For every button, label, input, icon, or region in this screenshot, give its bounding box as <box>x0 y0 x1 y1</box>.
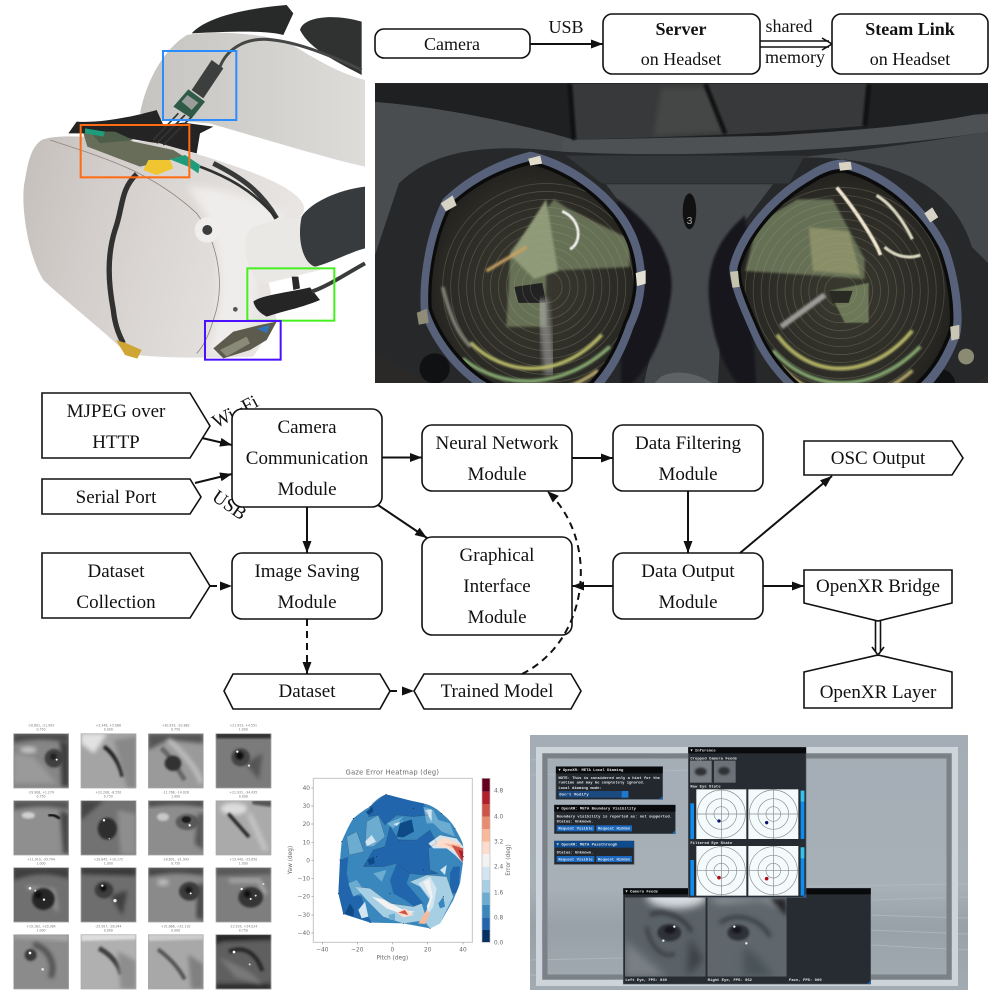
captions: 1.000 <box>36 929 46 933</box>
window: Camera Feeds: ▼ Camera Feeds <box>625 890 659 895</box>
module: Data Output: Module <box>658 592 718 613</box>
artifact: Trained Model: Trained Model <box>441 681 553 702</box>
colorbar: 1.6 <box>494 890 504 896</box>
colorbar: Error (deg) <box>506 844 512 876</box>
module: Image Saving: Module <box>277 592 337 613</box>
window: Passthrough: ▼ OpenXR: META Passthrough <box>557 842 618 847</box>
highlight: orange circuit board box <box>81 125 189 177</box>
photo: headset lenses with eye tracking ring: 3 <box>687 216 693 227</box>
arrow: trained model to neural network <box>522 491 581 674</box>
input: Dataset Collection <box>42 553 210 618</box>
captions: +21.931, -34.435 <box>229 791 257 795</box>
plot area with error contours: 40 <box>459 947 467 953</box>
captions: -13.293, +24.024 <box>229 925 257 929</box>
arrow: image saving to dataset <box>306 619 308 674</box>
sample 7 <box>148 800 204 855</box>
plot area with error contours: −40 <box>298 931 310 937</box>
module: Graphical Interface: Module <box>467 607 527 628</box>
window: Boundary Visibility <box>554 805 675 834</box>
colorbar: 0.0 <box>494 940 504 946</box>
window: Boundary Visibility: Boundary visibility is reported as: not supported. <box>557 814 672 819</box>
module: Camera Communication: Module <box>277 479 337 500</box>
plot area with error contours <box>288 778 472 962</box>
sample 2 <box>81 733 136 788</box>
input: Dataset Collection: Collection <box>76 592 156 613</box>
artifact: Dataset: Dataset <box>279 681 336 702</box>
module: Data Output: Data Output <box>641 561 735 582</box>
window: Boundary Visibility: ▼ OpenXR: META Boundary Visibility <box>557 806 637 811</box>
module: Graphical Interface: Interface <box>463 576 531 597</box>
sample 9 <box>13 867 69 922</box>
output: OpenXR Bridge: OpenXR Bridge <box>816 576 940 597</box>
plot area with error contours: 0 <box>390 947 394 953</box>
module: Image Saving <box>232 553 382 619</box>
captions: +20.845, +10.172 <box>94 858 123 862</box>
arrow: dataset to trained model <box>390 690 414 692</box>
plot area with error contours: −20 <box>351 947 364 953</box>
arrow: output to interface <box>572 585 613 587</box>
module: Neural Network <box>422 425 572 491</box>
box: Camera: Camera <box>424 34 480 54</box>
window: Passthrough: Status: Unknown. <box>557 850 593 855</box>
input: MJPEG over HTTP: HTTP <box>92 432 140 453</box>
module: Neural Network: Module <box>467 464 527 485</box>
arrow: camera to interface <box>378 505 427 538</box>
highlight: blue USB connector box <box>163 51 236 120</box>
colorbar: 2.4 <box>494 865 504 871</box>
artifact: Trained Model <box>414 674 581 709</box>
window: Local Dimming <box>556 767 663 799</box>
arrow: shared memory link <box>760 16 832 67</box>
arrow: output to OSC <box>740 476 832 553</box>
sample 1 <box>13 733 69 788</box>
captions: 1.000 <box>239 862 248 866</box>
captions: -18.601, -21.993 <box>162 858 189 862</box>
captions: +3.346, +5.068 <box>96 724 121 728</box>
sample 16 <box>216 934 272 989</box>
scene background <box>530 735 968 990</box>
sample 14 <box>81 934 136 989</box>
captions: +21.953, +4.551 <box>230 724 257 728</box>
captions: 1.000 <box>36 862 46 866</box>
arrow: shared memory link: memory <box>765 47 825 67</box>
window: Inference <box>688 747 806 897</box>
arrow: camera to image saving <box>306 507 308 553</box>
arrow: Wi-Fi to camera module <box>202 438 232 445</box>
box: Server on Headset <box>603 14 760 74</box>
window: Passthrough: Request Visible <box>558 857 593 862</box>
window: Local Dimming: runtime and may be completely ignored. <box>558 780 645 785</box>
sample 3 <box>148 733 204 788</box>
module: Image Saving: Image Saving <box>254 561 360 582</box>
window: Passthrough <box>554 841 634 864</box>
sample 11 <box>148 867 204 922</box>
openness bars <box>690 791 804 896</box>
window: Camera Feeds: Left Eye, FPS: 040 <box>625 978 668 983</box>
sample 10 <box>81 867 136 922</box>
plot area with error contours: 40 <box>303 786 310 792</box>
module: Graphical Interface <box>422 537 572 635</box>
captions: -25.507, -28.944 <box>95 925 122 929</box>
bottom padding and hands <box>375 351 988 450</box>
arrow: bridge to layer <box>872 621 884 655</box>
plot area with error contours: 30 <box>303 804 310 810</box>
captions: +22.208, -8.550 <box>95 791 121 795</box>
window: Inference: Filtered Eye State <box>690 841 733 846</box>
plot area with error contours: −30 <box>298 913 310 919</box>
box: Steam Link on Headset: on Headset <box>870 49 950 69</box>
diagram: streaming pipeline <box>375 14 988 74</box>
captions: +11.910, -33.794 <box>27 858 55 862</box>
chart: gaze error heatmap <box>288 769 512 962</box>
window: Inference: Raw Eye State <box>690 785 721 789</box>
box: Camera <box>375 29 530 58</box>
window: Local Dimming: Local dimming mode: <box>558 786 602 791</box>
module: Data Filtering: Module <box>658 464 718 485</box>
artifact: Dataset <box>224 674 390 709</box>
arrow: filtering to output <box>687 491 689 553</box>
box: Server on Headset: Server <box>656 19 706 39</box>
captions: -29.908, +1.279 <box>28 791 54 795</box>
colorbar: 3.2 <box>494 840 504 846</box>
plot area with error contours: 20 <box>424 947 432 953</box>
arrow: neural network to filtering <box>572 457 613 459</box>
colorbar: 4.8 <box>494 789 504 795</box>
input: MJPEG over HTTP <box>42 393 210 458</box>
captions: 1.000 <box>104 862 113 866</box>
arrow: USB to camera module <box>195 474 232 483</box>
left eye feed <box>625 897 706 977</box>
window: Inference: ▼ Inference <box>690 749 716 754</box>
colorbar: 0.8 <box>494 915 504 921</box>
window: Inference: Cropped Camera Feeds <box>690 756 738 761</box>
diagram: software architecture flowchart <box>42 391 963 709</box>
sample 6 <box>81 800 136 855</box>
captions: 1.000 <box>171 795 180 799</box>
captions: 0.000 <box>239 795 248 799</box>
chart title: Gaze Error Heatmap (deg) <box>346 769 439 777</box>
window: Local Dimming: NOTE: This is considered only a hint for the <box>558 776 661 781</box>
window: Boundary Visibility: Status: Unknown. <box>557 820 593 825</box>
output: OSC <box>804 441 963 475</box>
highlight: green cable plug box <box>247 268 334 321</box>
sample 4 <box>216 733 271 788</box>
plot area with error contours: −10 <box>298 877 310 883</box>
window: Camera Feeds: Right Eye, FPS: 052 <box>708 978 753 983</box>
plot area with error contours: 20 <box>303 822 310 828</box>
arrow: shared memory link: shared <box>766 16 812 36</box>
captions: +31.686, +32.110 <box>161 925 190 929</box>
figure: VR debug interface screenshot <box>530 735 968 990</box>
box: Steam Link on Headset <box>832 14 988 74</box>
plot area with error contours: −20 <box>298 895 310 901</box>
output: OpenXR Bridge <box>804 570 952 621</box>
window: Local Dimming: Don't Modify <box>559 793 589 798</box>
captions: +30.933, -20.882 <box>162 724 190 728</box>
window: Boundary Visibility: Request Hidden <box>598 827 631 832</box>
sample 15 <box>148 934 204 989</box>
captions: 0.000 <box>104 929 113 933</box>
output: OpenXR Layer: OpenXR Layer <box>820 682 937 703</box>
raw and filtered eye state plots <box>696 789 798 896</box>
module: Neural Network: Neural Network <box>436 433 559 454</box>
captions: 0.750 <box>36 795 46 799</box>
sample 13 <box>13 934 69 989</box>
label: Wi-Fi: Wi−Fi <box>209 391 262 433</box>
module: Data Filtering <box>613 425 763 491</box>
window: Camera Feeds: Face, FPS: 000 <box>789 979 822 983</box>
arrow: USB link: USB <box>548 17 584 37</box>
module: Data Output <box>613 553 763 619</box>
captions: 0.000 <box>104 728 113 732</box>
arrow: camera to neural network <box>382 456 422 458</box>
colorbar: 4.0 <box>494 815 504 821</box>
input: Dataset Collection: Dataset <box>88 561 145 582</box>
window: Camera Feeds <box>623 885 871 984</box>
module: Camera Communication <box>232 409 382 507</box>
captions: 0.750 <box>239 929 248 933</box>
captions: +13.440, -25.650 <box>229 858 257 862</box>
sample 5 <box>13 800 69 855</box>
box: Server on Headset: on Headset <box>641 49 721 69</box>
captions: +19.182, +20.384 <box>26 925 56 929</box>
cropped eye previews <box>690 761 736 783</box>
module: Camera Communication: Camera <box>277 417 337 438</box>
window: Boundary Visibility: Request Visible <box>558 827 593 832</box>
captions: 0.750 <box>171 862 180 866</box>
arrow: output to bridge <box>763 585 804 587</box>
plot area with error contours: −40 <box>316 947 329 953</box>
photo: headset lenses with eye tracking ring <box>375 83 988 383</box>
input: Serial Port <box>42 479 201 514</box>
captions: -18.601, -21.993 <box>28 724 54 728</box>
plot area with error contours: 10 <box>303 840 310 846</box>
sample 12 <box>216 867 271 922</box>
captions: 0.750 <box>171 728 180 732</box>
captions: 1.000 <box>239 728 248 732</box>
window: Local Dimming: ▼ OpenXR: META Local Dimming <box>558 768 624 773</box>
plot area with error contours: Pitch (deg) <box>377 956 408 962</box>
module: Camera Communication: Communication <box>246 448 369 469</box>
input: MJPEG over HTTP: MJPEG over <box>67 401 166 422</box>
right eye feed <box>707 897 787 977</box>
label: USB: USB <box>208 486 250 525</box>
plot area with error contours: 0 <box>306 858 310 864</box>
output: OSC: OSC Output <box>831 448 926 469</box>
right lens <box>729 160 962 383</box>
module: Graphical Interface: Graphical <box>460 545 534 566</box>
plot area with error contours: Yaw (deg) <box>288 846 294 875</box>
captions <box>26 724 257 933</box>
captions: 0.750 <box>36 728 46 732</box>
sample 8 <box>216 800 271 855</box>
arrow: dataset collection to image saving <box>210 585 232 587</box>
colorbar <box>482 778 512 946</box>
module: Data Filtering: Data Filtering <box>635 433 742 454</box>
figure: grid of eye camera samples <box>13 724 272 989</box>
input: Serial Port: Serial Port <box>76 487 157 508</box>
captions: 0.000 <box>171 929 180 933</box>
captions: -11.768, -14.028 <box>162 791 189 795</box>
highlight: purple camera board box <box>205 321 281 360</box>
captions: 0.750 <box>104 795 113 799</box>
photo: modified headset with highlighted components <box>23 5 365 360</box>
box: Steam Link on Headset: Steam Link <box>865 19 955 39</box>
left lens <box>416 152 646 383</box>
arrow: USB link <box>530 17 603 44</box>
window: Passthrough: Request Hidden <box>598 857 631 862</box>
output: OpenXR Layer <box>804 655 952 708</box>
